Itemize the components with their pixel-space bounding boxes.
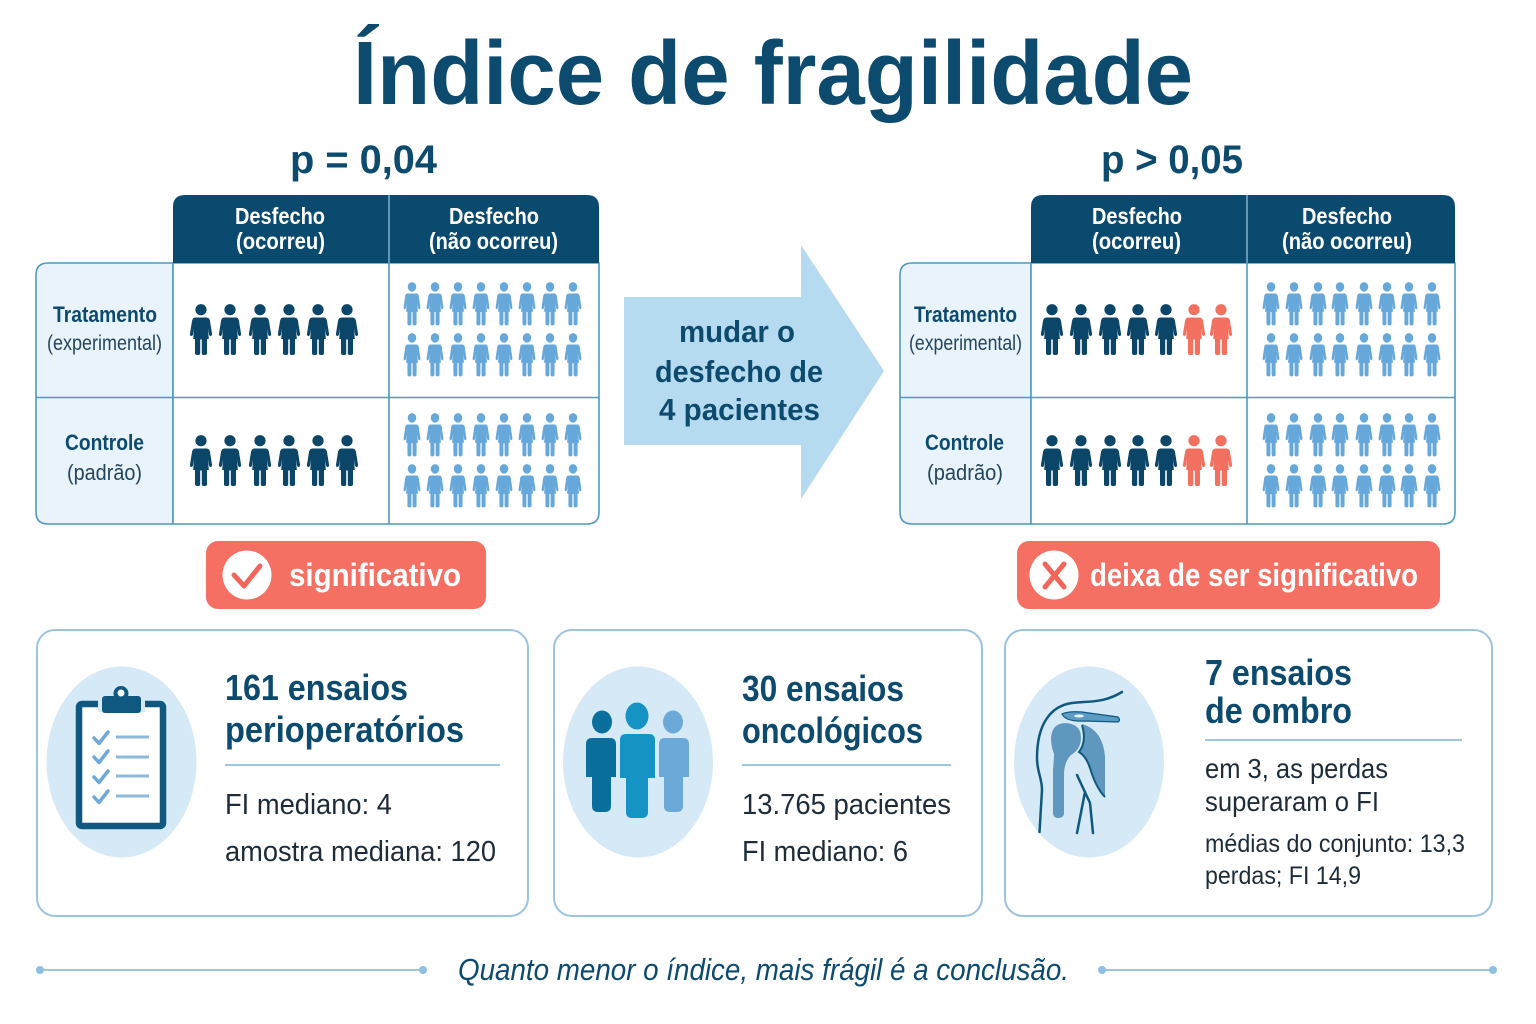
icon: shoulder anatomy <box>1037 692 1122 833</box>
header: occurred <box>1092 203 1182 254</box>
footer conclusion: Quanto menor o índice, mais frágil é a conclusão. <box>458 952 1069 987</box>
table body <box>173 263 599 524</box>
card heading: oncológicos <box>742 710 923 751</box>
card stats: FI mediano: 6 <box>742 836 908 868</box>
people: control, no outcome <box>1263 413 1440 507</box>
row label: control: (padrão) <box>67 460 142 485</box>
row label: control: Controle <box>925 430 1004 455</box>
row label: treatment <box>909 302 1022 355</box>
card heading <box>225 667 464 750</box>
arrow: change the outcome of 4 patients: desfecho de <box>655 354 823 389</box>
card stats: perdas; FI 14,9 <box>1205 862 1361 890</box>
arrow: change the outcome of 4 patients <box>624 245 884 499</box>
arrow: change the outcome of 4 patients: mudar o <box>679 314 795 349</box>
card stats: 13.765 pacientes <box>742 789 951 821</box>
header: occurred: Desfecho <box>235 203 325 229</box>
card stats: médias do conjunto: 13,3 <box>1205 830 1465 858</box>
header: did not occur: (não ocorreu) <box>1282 228 1412 254</box>
card stats <box>1205 753 1465 890</box>
card heading: de ombro <box>1205 690 1352 731</box>
card stats: amostra mediana: 120 <box>225 836 496 868</box>
p value: right: p > 0,05 <box>1101 138 1243 182</box>
row label: treatment: (experimental) <box>909 332 1022 355</box>
row label cells <box>36 263 173 524</box>
card heading: 30 ensaios <box>742 668 904 709</box>
row label cells <box>900 263 1031 524</box>
header: did not occur: Desfecho <box>1302 203 1392 229</box>
row label: control: Controle <box>65 430 144 455</box>
card stats <box>225 789 496 868</box>
header: occurred: (ocorreu) <box>1092 228 1181 254</box>
people: control, no outcome <box>404 413 581 507</box>
row label: treatment: Tratamento <box>53 302 157 327</box>
icon: clipboard <box>79 686 163 826</box>
header: occurred <box>235 203 325 254</box>
table body <box>1031 263 1455 524</box>
card heading <box>1205 652 1352 731</box>
card stats: em 3, as perdas <box>1205 753 1388 784</box>
people: treatment, no outcome <box>1263 282 1440 376</box>
panel: right contingency table <box>900 195 1455 524</box>
title: Índice de fragilidade <box>353 23 1193 124</box>
card stats: FI mediano: 4 <box>225 789 392 821</box>
header: did not occur: Desfecho <box>449 203 539 229</box>
row label: control <box>925 430 1004 485</box>
badge: no longer significant: deixa de ser significativo <box>1090 557 1418 593</box>
people: control, outcome occurred, two changed <box>1041 435 1232 486</box>
people: treatment, outcome occurred, two changed <box>1041 304 1232 355</box>
row label: treatment <box>47 302 162 355</box>
p value: left: p = 0,04 <box>290 138 438 182</box>
header: occurred: Desfecho <box>1092 203 1182 229</box>
header: did not occur <box>429 203 558 254</box>
people: treatment, no outcome <box>404 282 581 376</box>
card heading: perioperatórios <box>225 709 464 750</box>
people: treatment, outcome occurred <box>190 304 358 355</box>
header cells <box>1031 195 1455 263</box>
badge: no longer significant <box>1017 541 1440 609</box>
panel: left contingency table <box>36 195 599 524</box>
row label: control <box>65 430 144 485</box>
row label: treatment: Tratamento <box>914 302 1017 327</box>
header: did not occur <box>1282 203 1412 254</box>
card stats <box>742 789 951 868</box>
row label: control: (padrão) <box>927 460 1003 485</box>
header: did not occur: (não ocorreu) <box>429 228 558 254</box>
badge: significant: significativo <box>289 557 461 593</box>
people: control, outcome occurred <box>190 435 358 486</box>
panel: oncology trials <box>554 630 982 916</box>
card heading <box>742 668 923 751</box>
panel: perioperative trials <box>37 630 528 916</box>
card heading: 7 ensaios <box>1205 652 1352 693</box>
header: occurred: (ocorreu) <box>236 228 325 254</box>
card heading: 161 ensaios <box>225 667 408 708</box>
panel: shoulder trials <box>1005 630 1492 916</box>
badge: significant <box>206 541 486 609</box>
icon: three people <box>586 702 689 818</box>
row label: treatment: (experimental) <box>47 332 162 355</box>
arrow: change the outcome of 4 patients: 4 pacientes <box>659 392 820 427</box>
header cells <box>173 195 599 263</box>
card stats: superaram o FI <box>1205 786 1379 817</box>
